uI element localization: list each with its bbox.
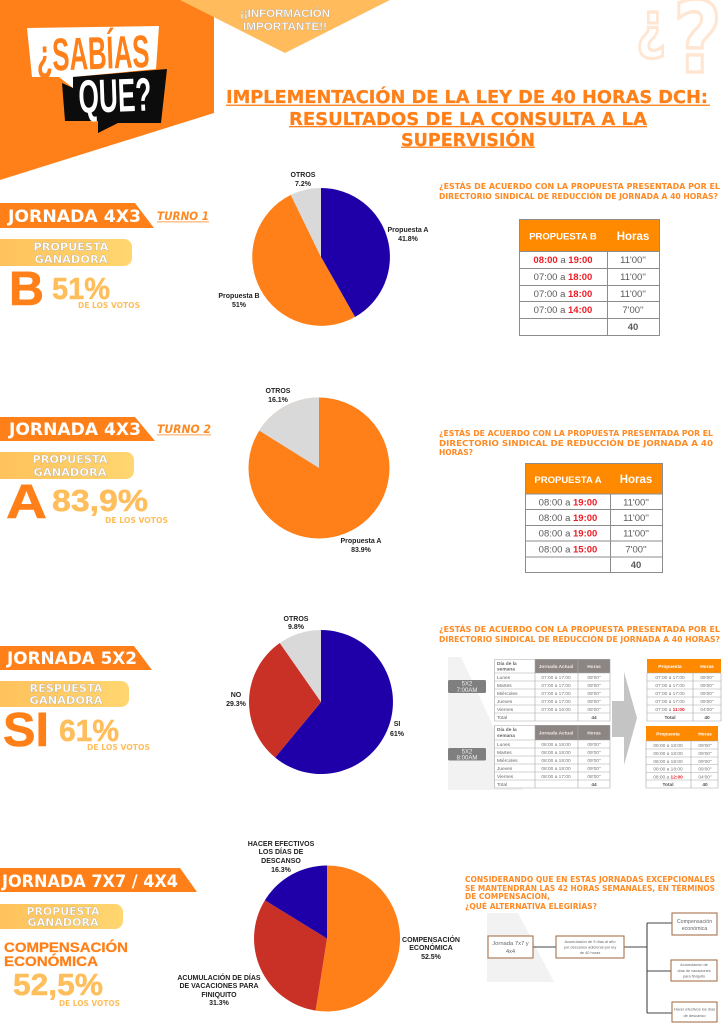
label: turno 2: TURNO 2 <box>157 422 211 436</box>
box: compensación económica: Compensación <box>677 919 712 925</box>
result: compensación económica 52,5% <box>4 938 128 1008</box>
table: jornada actual 8:00: Total <box>497 782 507 788</box>
pill: propuesta ganadora <box>0 452 134 479</box>
box: acumulación de días de vacaciones: para finiquito <box>683 974 705 978</box>
pie chart: jornada 7x7 / 4x4: DESCANSO <box>261 858 301 865</box>
table: jornada actual 7:00: Viernes <box>497 707 514 713</box>
table: propuesta 8:00: Total <box>662 782 674 788</box>
table: propuesta 7:00: 09'00" <box>700 683 714 689</box>
panel: jornada 4x3 turno 1 summary <box>0 203 209 316</box>
question: turno 1 <box>439 182 720 201</box>
box: acumulación de 9 días: de 40 horas <box>580 950 600 955</box>
pie chart: turno 1: 41.8% <box>398 236 419 243</box>
label: 5x2 7:00AM: 5X2 <box>462 682 473 688</box>
table: jornada actual 7:00: 07:00 a 17:00 <box>541 683 571 689</box>
header ribbon: información importante: ¡¡INFORMACIÓN <box>240 7 330 20</box>
table: propuesta B: 07:00 a 18:00 <box>534 289 592 300</box>
pie chart: jornada 7x7 / 4x4: ACUMULACIÓN DE DÍAS <box>177 973 261 982</box>
table: propuesta B: 07:00 a 14:00 <box>534 305 592 316</box>
table: jornada actual 7:00: 07:00 a 17:00 <box>541 699 571 705</box>
banner: jornada 4x3: JORNADA 4X3 <box>8 420 141 439</box>
result: B 51% <box>9 263 140 316</box>
table: jornada actual 7:00: 07:00 a 17:00 <box>541 675 571 681</box>
box: acumulación de 9 días: por descanso adicional por ley <box>564 944 616 950</box>
question: jornada 7x7 / 4x4: ¿QUÉ ALTERNATIVA ELEGIRÍAS? <box>465 902 597 911</box>
banner: jornada 5x2: JORNADA 5X2 <box>6 649 137 668</box>
table: propuesta B: 07:00 a 18:00 <box>534 272 592 283</box>
question: turno 1: ¿ESTÁS DE ACUERDO CON LA PROPUESTA PRESENTADA POR EL <box>439 182 720 191</box>
pie chart: jornada 5x2: 61% <box>390 731 405 738</box>
table: jornada actual 8:00: 08:00 a 18:00 <box>541 766 571 772</box>
table: propuesta B: PROPUESTA B <box>529 232 597 242</box>
table: propuesta B: 08:00 a 19:00 <box>533 255 593 266</box>
title: IMPLEMENTACIÓN DE LA LEY DE 40 HORAS DCH: <box>226 86 708 108</box>
table: propuesta 8:00: 09'00" <box>698 766 712 772</box>
question: turno 2: DIRECTORIO SINDICAL DE REDUCCIÓN DE JORNADA A 40 <box>439 439 713 448</box>
table: jornada actual 8:00: Viernes <box>497 774 514 780</box>
table: propuesta 7:00: Propuesta <box>658 664 682 670</box>
table: jornada actual 7:00: 09'00" <box>587 675 601 681</box>
table: propuesta 8:00: 09'00" <box>698 743 712 749</box>
table: jornada actual 7:00: 09'00" <box>587 683 601 689</box>
result: compensación económica 52,5%: ECONÓMICA <box>4 952 98 969</box>
table: propuesta 7:00: 40 <box>704 715 710 721</box>
table: propuesta A: PROPUESTA A <box>534 475 602 486</box>
table: jornada actual 7:00: 07:00 a 16:00 <box>541 707 571 713</box>
table: propuesta 7:00: 09'00" <box>700 691 714 697</box>
question: jornada 7x7 / 4x4: SE MANTENDRÁN LAS 42 HORAS SEMANALES, EN TÉRMINOS <box>465 884 715 893</box>
pie chart: jornada 5x2: 29.3% <box>226 701 247 708</box>
box: jornada 7x7 y 4x4: 4x4 <box>506 949 516 955</box>
table: propuesta 7:00 <box>647 659 721 721</box>
label: turno 1: TURNO 1 <box>157 209 209 223</box>
question: turno 2: ¿ESTÁS DE ACUERDO CON LA PROPUESTA PRESENTADA POR EL <box>439 429 713 438</box>
pill: propuesta ganadora: GANADORA <box>28 917 99 929</box>
panel: jornada 4x3 turno 2 summary <box>0 417 211 529</box>
question: jornada 5x2 <box>439 625 720 644</box>
table: jornada actual 8:00: 09'00" <box>587 742 601 748</box>
label: 5x2 8:00AM: 8:00AM <box>457 756 477 762</box>
pill: propuesta ganadora: GANADORA <box>34 467 107 479</box>
table: propuesta 7:00: 07:00 a 17:00 <box>655 699 685 705</box>
logo: ¿Sabías que? speech bubbles: ¿SABÍAS <box>36 25 150 81</box>
title <box>226 86 710 151</box>
table: propuesta A: 11'00'' <box>623 498 649 508</box>
table: jornada actual 7:00: 09'00" <box>587 691 601 697</box>
table: propuesta 8:00: 04'00" <box>698 774 712 780</box>
question: jornada 5x2: DIRECTORIO SINDICAL DE REDUCCIÓN DE JORNADA A 40 HORAS? <box>439 635 720 644</box>
pill: propuesta ganadora: PROPUESTA <box>26 906 100 918</box>
pie chart: jornada 7x7 / 4x4: DE VACACIONES PARA <box>179 983 259 990</box>
table: jornada actual 8:00 <box>494 725 610 788</box>
box: hacer efectivos los días de descanso: Hacer efectivos los días <box>674 1006 715 1012</box>
table: propuesta 7:00: 09'00" <box>700 699 714 705</box>
table: jornada actual 7:00: 08'00" <box>587 707 601 713</box>
banner: jornada 4x3: JORNADA 4X3 <box>7 207 141 226</box>
pie chart: turno 1: Propuesta A <box>388 227 428 234</box>
logo: ¿Sabías que? speech bubbles: QUE? <box>77 67 152 123</box>
pill: respuesta ganadora: GANADORA <box>30 695 103 707</box>
pill: respuesta ganadora: RESPUESTA <box>30 683 103 695</box>
table: propuesta B: 11'00'' <box>620 289 646 300</box>
result: SI 61%: 61% <box>59 713 119 748</box>
table: jornada actual 8:00: semana <box>497 734 515 739</box>
box: compensación económica: económica <box>682 926 707 932</box>
result: SI 61%: DE LOS VOTOS <box>87 743 150 752</box>
pie chart: jornada 5x2: 9.8% <box>288 624 305 631</box>
pie chart: jornada 5x2 <box>226 616 405 774</box>
table: propuesta 7:00: 07:00 a 11:00 <box>655 707 685 713</box>
result: A 83,9% <box>6 476 168 529</box>
table: propuesta A <box>525 463 662 572</box>
table: jornada actual 7:00: Horas <box>587 664 601 670</box>
result: B 51%: 51% <box>52 271 110 306</box>
title: SUPERVISIÓN <box>401 129 535 151</box>
table: jornada actual 7:00: 09'00" <box>587 699 601 705</box>
pie chart: turno 1: OTROS <box>291 172 316 179</box>
panel: jornada 5x2 summary <box>0 646 152 757</box>
question: turno 2: HORAS? <box>439 448 473 457</box>
pie chart: jornada 5x2: SI <box>394 721 400 728</box>
background shape: flow diagram <box>487 913 554 982</box>
pie chart: jornada 7x7 / 4x4: 52.5% <box>421 954 442 961</box>
table: jornada actual 7:00 <box>494 659 610 721</box>
table: jornada actual 7:00: Miércoles <box>497 691 518 697</box>
table: jornada actual 8:00: 08'00" <box>587 774 601 780</box>
table: propuesta 8:00 <box>646 726 718 788</box>
flow diagram: compensation alternatives <box>488 913 717 1022</box>
question: turno 2 <box>439 429 713 457</box>
pie chart: turno 2: 83.9% <box>351 547 372 554</box>
box: acumulación de días de vacaciones: días de vacaciones <box>677 968 711 973</box>
table: jornada actual 8:00: 08:00 a 18:00 <box>541 758 571 764</box>
result: SI 61%: SI <box>3 704 49 757</box>
table: jornada actual 8:00: Miércoles <box>497 758 518 764</box>
banner: jornada 4x3 <box>0 417 155 441</box>
pie chart: jornada 5x2: OTROS <box>284 616 309 623</box>
box: jornada 7x7 y 4x4: Jornada 7x7 y <box>492 941 529 947</box>
table: propuesta 7:00: 07:00 a 17:00 <box>655 691 685 697</box>
pie chart: jornada 7x7 / 4x4: 31.3% <box>209 1000 230 1007</box>
table: propuesta 8:00: 08:00 a 12:00 <box>653 774 683 780</box>
table: propuesta 7:00: Total <box>664 715 676 721</box>
table: jornada actual 8:00: Horas <box>587 730 601 736</box>
question: jornada 7x7 / 4x4: CONSIDERANDO QUE EN ESTAS JORNADAS EXCEPCIONALES <box>465 875 715 884</box>
pill: propuesta ganadora <box>0 904 123 929</box>
pie chart: jornada 7x7 / 4x4 <box>177 841 460 1012</box>
pie chart: turno 2: 16.1% <box>268 397 289 404</box>
table: propuesta 7:00: Horas <box>700 664 714 670</box>
pie chart: jornada 7x7 / 4x4: ECONÓMICA <box>409 943 453 952</box>
icon: decorative question marks <box>636 0 722 96</box>
pie chart: turno 2: Propuesta A <box>341 538 381 545</box>
pie chart: jornada 5x2: NO <box>231 692 242 699</box>
table: jornada actual 8:00: 08:00 a 18:00 <box>541 750 571 756</box>
table: jornada actual 7:00: 44 <box>591 715 597 721</box>
table: jornada actual 7:00: Jueves <box>497 699 513 705</box>
box: acumulación de días de vacaciones: Acumulación de <box>680 962 708 967</box>
label: 5x2 7:00AM <box>448 680 486 694</box>
pie chart: jornada 7x7 / 4x4: HACER EFECTIVOS <box>248 841 315 848</box>
header ribbon: información importante: IMPORTANTE!! <box>243 21 327 33</box>
pill: propuesta ganadora: PROPUESTA <box>32 454 108 466</box>
table: propuesta A: 11'00'' <box>623 528 649 540</box>
table: jornada actual 8:00: 44 <box>591 782 597 788</box>
result: compensación económica 52,5%: DE LOS VOTOS <box>59 999 120 1008</box>
table: jornada actual 8:00: 08:00 a 18:00 <box>541 742 571 748</box>
table: propuesta A: 40 <box>631 560 641 571</box>
question: jornada 5x2: ¿ESTÁS DE ACUERDO CON LA PROPUESTA PRESENTADA POR EL <box>439 625 720 634</box>
table: jornada actual 8:00: Jueves <box>497 766 513 772</box>
table: propuesta A: 11'00'' <box>623 513 649 524</box>
result: compensación económica 52,5%: COMPENSACIÓN <box>4 938 128 955</box>
result: A 83,9%: 83,9% <box>52 483 148 518</box>
box: acumulación de 9 días <box>556 936 624 958</box>
panel: jornada 7x7 / 4x4 summary <box>0 868 197 1008</box>
table: jornada actual 8:00: Jornada Actual <box>539 730 573 736</box>
box: hacer efectivos los días de descanso: de descanso <box>683 1013 706 1018</box>
box: compensación económica <box>672 913 717 935</box>
table: propuesta 8:00: 08:00 a 18:00 <box>653 743 683 749</box>
result: A 83,9%: A <box>6 476 47 529</box>
pie chart: turno 1 <box>218 172 428 326</box>
result: A 83,9%: DE LOS VOTOS <box>105 516 168 525</box>
table: jornada actual 7:00: Martes <box>497 683 512 689</box>
label: 5x2 7:00AM: 7:00AM <box>457 688 477 694</box>
table: propuesta 8:00: 08:00 a 18:00 <box>653 766 683 772</box>
pie chart: jornada 7x7 / 4x4: LOS DÍAS DE <box>259 847 304 856</box>
table: jornada actual 7:00: Lunes <box>497 675 511 681</box>
table: propuesta 7:00: 07:00 a 17:00 <box>655 683 685 689</box>
pie chart: turno 2: OTROS <box>266 388 291 395</box>
box: acumulación de días de vacaciones <box>671 960 717 981</box>
result: compensación económica 52,5%: 52,5% <box>13 967 103 1002</box>
table: propuesta A: 08:00 a 19:00 <box>539 513 597 524</box>
box: jornada 7x7 y 4x4 <box>488 936 533 958</box>
pie chart: turno 1: 7.2% <box>295 181 312 188</box>
table: propuesta B: 11'00'' <box>620 255 646 266</box>
pie chart: turno 1: Propuesta B <box>218 293 260 300</box>
table: propuesta A: 08:00 a 15:00 <box>539 544 597 556</box>
result: B 51%: DE LOS VOTOS <box>78 301 140 310</box>
table: jornada actual 7:00: semana <box>497 668 515 672</box>
table: propuesta A: 08:00 a 19:00 <box>539 528 597 540</box>
question: turno 1: DIRECTORIO SINDICAL DE REDUCCIÓN DE JORNADA A 40 HORAS? <box>439 192 718 201</box>
table: jornada actual 8:00: 08:00 a 17:00 <box>541 774 571 780</box>
table: propuesta 7:00: 07:00 a 17:00 <box>655 675 685 681</box>
table: propuesta 7:00: 09'00" <box>700 675 714 681</box>
header orange background shape <box>0 0 214 180</box>
table: propuesta B: 40 <box>628 322 638 333</box>
pill: respuesta ganadora <box>0 681 129 707</box>
pie chart: turno 2 <box>248 388 390 554</box>
label: 5x2 8:00AM: 5X2 <box>462 750 473 756</box>
banner: jornada 4x3 <box>0 203 154 228</box>
result: B 51%: B <box>9 263 44 316</box>
table: jornada actual 8:00: Martes <box>497 750 512 756</box>
table: propuesta B: 7'00'' <box>622 305 644 316</box>
pill: propuesta ganadora: GANADORA <box>34 254 108 266</box>
table: jornada actual 8:00: 09'00" <box>587 758 601 764</box>
table: propuesta 8:00: 08:00 a 18:00 <box>653 759 683 765</box>
header ribbon: información importante <box>180 0 390 53</box>
table: jornada actual 7:00: 07:00 a 17:00 <box>541 691 571 697</box>
table: jornada actual 8:00: 09'00" <box>587 750 601 756</box>
banner: jornada 5x2 <box>0 646 152 670</box>
table: propuesta A: Horas <box>620 474 652 486</box>
table: propuesta B <box>519 219 660 336</box>
table: propuesta A: 08:00 a 19:00 <box>539 498 597 508</box>
table: propuesta B: 11'00'' <box>620 272 646 283</box>
table: propuesta 8:00: 40 <box>702 782 708 788</box>
logo: ¿Sabías que? speech bubbles <box>27 25 167 133</box>
question: jornada 7x7 / 4x4 <box>465 875 715 911</box>
arrow: current to proposal <box>612 672 637 765</box>
background shape: 5x2 tables <box>448 657 523 790</box>
pill: propuesta ganadora <box>0 239 132 266</box>
table: propuesta B: Horas <box>617 231 649 243</box>
table: propuesta 8:00: 09'00" <box>698 759 712 765</box>
table: jornada actual 7:00: Total <box>497 715 507 721</box>
table: jornada actual 8:00: Día de la <box>497 727 517 733</box>
label: 5x2 8:00AM <box>448 748 486 762</box>
table: jornada actual 7:00: Jornada Actual <box>539 664 573 670</box>
pie chart: turno 1: 51% <box>232 302 247 309</box>
table: propuesta 8:00: 08:00 a 18:00 <box>653 751 683 757</box>
pill: propuesta ganadora: PROPUESTA <box>34 242 109 254</box>
box: hacer efectivos los días de descanso <box>672 1002 717 1022</box>
result: SI 61% <box>3 704 150 757</box>
table: jornada actual 8:00: Lunes <box>497 742 511 748</box>
question: jornada 7x7 / 4x4: DE COMPENSACIÓN, <box>465 892 550 901</box>
pie chart: jornada 7x7 / 4x4: COMPENSACIÓN <box>402 935 460 944</box>
pie chart: jornada 7x7 / 4x4: FINIQUITO <box>201 992 237 999</box>
pie chart: jornada 7x7 / 4x4: 16.3% <box>271 867 292 874</box>
table: propuesta 7:00: 04'00" <box>700 707 714 713</box>
table: jornada actual 8:00: 09'00" <box>587 766 601 772</box>
table: jornada actual 7:00: Día de la <box>497 661 517 667</box>
box: acumulación de 9 días: Acumulación de 9 días al año <box>564 939 616 944</box>
table: propuesta 8:00: Propuesta <box>656 732 680 738</box>
banner: jornada 7x7 / 4x4: JORNADA 7X7 / 4X4 <box>1 872 178 891</box>
table: propuesta A: 7'00'' <box>625 544 647 556</box>
table: propuesta 8:00: 09'00" <box>698 751 712 757</box>
table: propuesta 8:00: Horas <box>698 732 712 738</box>
title: RESULTADOS DE LA CONSULTA A LA <box>289 110 647 130</box>
